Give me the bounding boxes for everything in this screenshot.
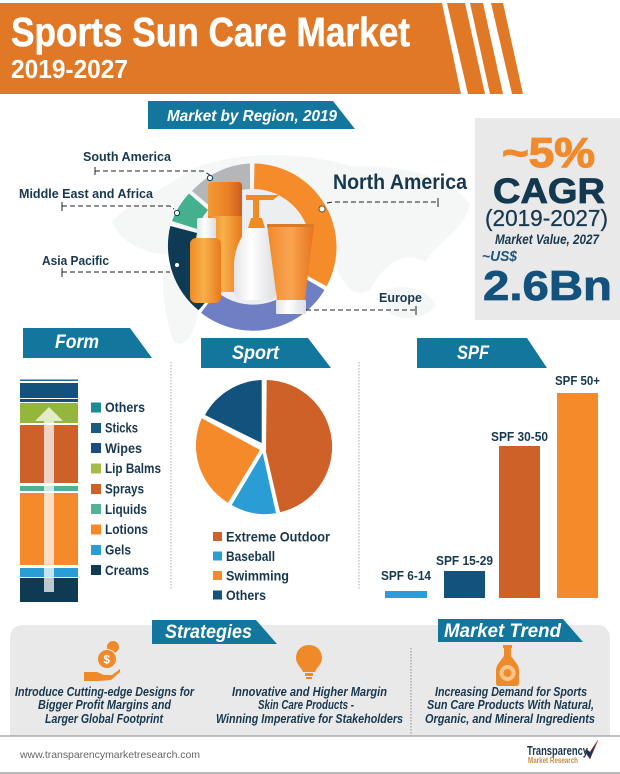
- segment: North America: [254, 164, 336, 286]
- legend: form: Lotions: [105, 522, 148, 537]
- legend: form: Liquids: [105, 502, 147, 517]
- bar: SPF 15-29: SPF 15-29: [436, 554, 493, 568]
- bar: SPF 50+: [555, 374, 600, 598]
- text: strategy 1: Bigger Profit Margins and: [38, 698, 171, 712]
- label: North America: [319, 171, 467, 212]
- legend: form: [91, 400, 161, 578]
- logo: Transparency Market Research: [527, 740, 598, 765]
- text: strategy 1: Introduce Cutting-edge Designs for: [15, 685, 195, 699]
- segment: Middle East and Africa: [172, 194, 208, 229]
- legend: form: Lip Balms: [105, 461, 161, 476]
- header banner: [0, 3, 523, 94]
- icon: sunscreen bottle: [496, 645, 519, 686]
- subtitle: 2019-2027: [11, 54, 128, 84]
- legend: form: Sticks: [105, 420, 138, 436]
- section banner: market by region: Market by Region, 2019: [167, 108, 337, 125]
- legend: form: Wipes: [105, 441, 142, 456]
- pie chart: sport: [196, 380, 332, 514]
- label: Asia Pacific: [42, 253, 179, 277]
- label: Asia Pacific: Asia Pacific: [42, 253, 109, 268]
- text: market trend: Increasing Demand for Sports: [435, 685, 587, 699]
- title: Sports Sun Care Market: [11, 9, 410, 55]
- icon: hand holding coin: [84, 641, 120, 681]
- icon: hand holding coin: $: [104, 654, 110, 666]
- pump bottle: [234, 195, 279, 300]
- tube: [267, 224, 314, 314]
- slice: Swimming: [196, 418, 260, 503]
- currency: ~US$: [482, 249, 518, 265]
- section banner: market trend: Market Trend: [444, 621, 561, 642]
- text: market trend: [425, 685, 595, 726]
- text: strategy 1: [15, 685, 195, 726]
- text: market trend: Organic, and Mineral Ingredients: [425, 712, 595, 726]
- slice: Baseball: [232, 453, 276, 514]
- section banner: strategies: Strategies: [165, 622, 252, 643]
- bar: SPF 6-14: SPF 6-14: [381, 569, 431, 583]
- text: strategy 1: Larger Global Footprint: [45, 712, 164, 726]
- CAGR figure: ~5%: [502, 129, 595, 176]
- segment: Asia Pacific: [168, 226, 216, 310]
- product group: sun care bottles: [190, 182, 314, 314]
- legend: sport: Swimming: [226, 568, 289, 584]
- label: South America: South America: [83, 150, 172, 164]
- section banner: SPF: SPF: [457, 343, 490, 364]
- label: North America: North America: [333, 171, 467, 194]
- segment: Europe: [201, 277, 324, 331]
- legend: form: Creams: [105, 563, 149, 578]
- legend: form: Gels: [105, 542, 131, 558]
- text: strategy 2: Innovative and Higher Margin: [232, 685, 387, 699]
- bar chart: SPF: [381, 374, 600, 598]
- slice: Others: [205, 380, 262, 443]
- section banner: sport: [201, 338, 331, 368]
- label: Europe: Europe: [379, 290, 422, 305]
- legend: form: Others: [105, 400, 145, 415]
- legend: sport: [213, 530, 331, 603]
- text: strategy 2: [216, 685, 403, 726]
- section banner: strategies: [152, 620, 277, 644]
- text: strategy 2: Winning Imperative for Stakeholders: [216, 712, 403, 726]
- text: market trend: Sun Care Products With Natural,: [427, 698, 594, 712]
- bar: SPF 30-50: SPF 30-50: [491, 430, 548, 444]
- market value caption: Market Value, 2027: [495, 232, 600, 247]
- panel: strategies and market trend: [10, 619, 610, 736]
- arrow: [35, 407, 63, 592]
- section banner: sport: Sport: [232, 343, 280, 364]
- donut chart: market by region: [168, 164, 336, 331]
- legend: sport: Baseball: [226, 549, 275, 564]
- small bottle: [190, 218, 221, 303]
- legend: sport: Extreme Outdoor: [226, 530, 331, 544]
- section banner: SPF: [417, 338, 547, 368]
- footer website: www.transparencymarketresearch.com: [19, 749, 200, 761]
- section banner: form: [23, 328, 152, 358]
- bar: SPF 50+: SPF 50+: [555, 374, 600, 388]
- CAGR period: (2019-2027): [485, 205, 608, 231]
- bar: SPF 6-14: [381, 569, 431, 598]
- label: Middle East and Africa: Middle East and Africa: [19, 186, 154, 201]
- logo: Transparency Market Research: Market Research: [528, 756, 578, 765]
- panel: CAGR and market value: [475, 118, 620, 320]
- logo: Transparency Market Research: Transparency: [527, 743, 589, 758]
- legend: sport: Others: [226, 588, 266, 603]
- slice: Extreme Outdoor: [266, 380, 332, 512]
- bar: SPF 15-29: [436, 554, 493, 598]
- icon: light bulb: [296, 645, 322, 679]
- world map backdrop: [112, 155, 470, 344]
- market value figure: 2.6Bn: [483, 262, 612, 309]
- bar: SPF 30-50: [491, 430, 548, 598]
- label: South America: [83, 150, 213, 181]
- section banner: market by region: [148, 101, 355, 129]
- section banner: form: Form: [55, 332, 99, 353]
- stacked bar: form: [20, 380, 78, 602]
- tall spray bottle: [208, 182, 242, 292]
- legend: form: Sprays: [105, 482, 144, 496]
- label: Europe: [306, 290, 422, 315]
- text: strategy 2: Skin Care Products -: [258, 698, 354, 712]
- CAGR label: CAGR: [493, 172, 605, 211]
- segment: South America: [192, 164, 250, 207]
- label: Middle East and Africa: [19, 186, 180, 216]
